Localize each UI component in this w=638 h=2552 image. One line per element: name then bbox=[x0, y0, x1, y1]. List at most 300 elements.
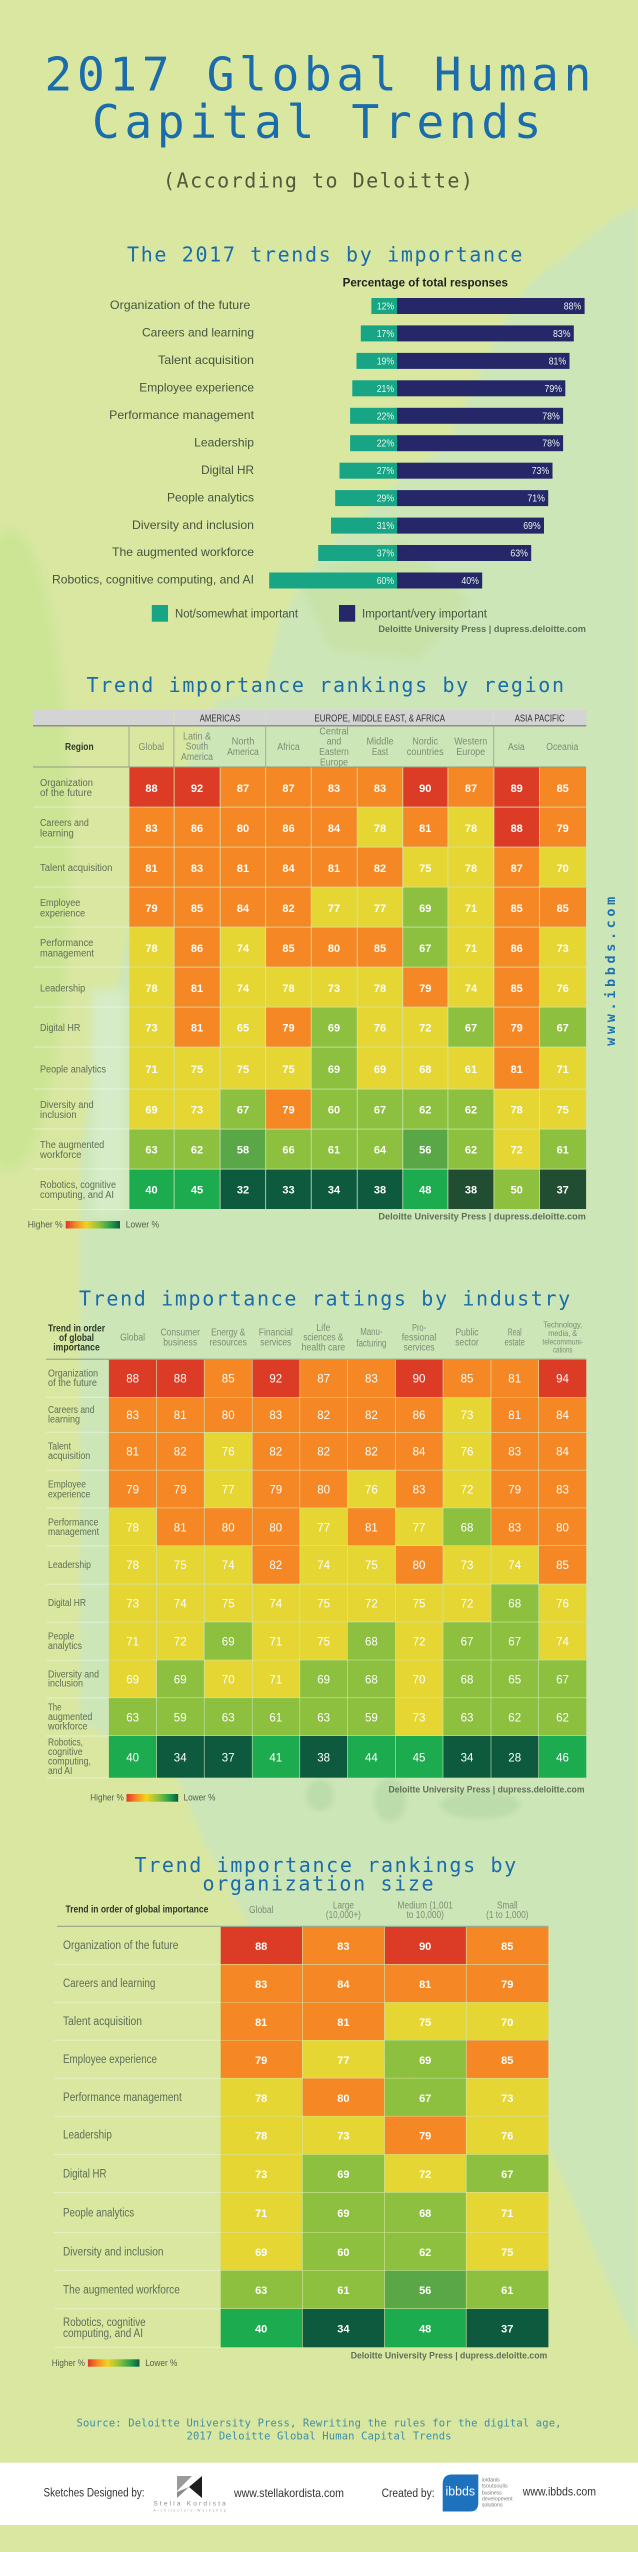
column headers: industry: facturing bbox=[356, 1338, 386, 1349]
bar row: Robotics, cognitive computing, and AI: Robotics, cognitive computing, and AI bbox=[52, 573, 254, 587]
heat row: Digital HR: 76 bbox=[556, 1598, 569, 1610]
heat row: Leadership: 81 bbox=[191, 983, 203, 995]
heat row: Talent acquisition: 81 bbox=[126, 1447, 139, 1459]
heat row: Careers and learning bbox=[109, 1398, 586, 1432]
bar row: Digital HR bbox=[201, 463, 552, 479]
heat row: People analytics: 69 bbox=[374, 1064, 386, 1076]
heat row: Performance management: 81 bbox=[365, 1522, 378, 1534]
panel: trends by importance bbox=[52, 242, 586, 635]
heat row: Diversity and inclusion: 75 bbox=[501, 2247, 513, 2259]
heat row: Performance management: 80 bbox=[337, 2093, 350, 2105]
heat row: Careers and learning: 81 bbox=[419, 1979, 431, 1991]
column headers: organization size: (1 to 1,000) bbox=[486, 1910, 528, 1921]
source note: Source: Deloitte University Press, Rewriting the rules for the digital age, bbox=[76, 2418, 562, 2430]
heat row: Organization of the future: 85 bbox=[461, 1374, 473, 1386]
heat row: The augmented workforce: 66 bbox=[282, 1144, 295, 1156]
column headers: America bbox=[181, 752, 213, 763]
footer band bbox=[0, 2463, 638, 2525]
column headers: industry: sector bbox=[455, 1337, 479, 1348]
heat row: The augmented workforce bbox=[129, 1130, 586, 1169]
column headers: industry: media, & bbox=[548, 1328, 577, 1338]
heat row: Talent acquisition: 82 bbox=[365, 1447, 378, 1459]
heat row: People analytics: 67 bbox=[508, 1636, 521, 1648]
heat row: Robotics, cognitive computing, and AI: 33 bbox=[282, 1184, 295, 1196]
heat row: Digital HR: 72 bbox=[461, 1598, 473, 1610]
heat row: Talent acquisition: 87 bbox=[511, 863, 523, 875]
heat row: People analytics: 71 bbox=[255, 2208, 267, 2220]
bar row: Diversity and inclusion bbox=[132, 518, 544, 534]
heat row: People analytics: 75 bbox=[191, 1064, 203, 1076]
heat row: Performance management: 68 bbox=[461, 1522, 473, 1534]
heat row: People analytics: 61 bbox=[465, 1064, 477, 1076]
heat row: Diversity and inclusion: 67 bbox=[556, 1674, 569, 1686]
heat row: Careers and learning: 82 bbox=[365, 1410, 378, 1422]
heat row: The augmented workforce: 63 bbox=[461, 1712, 473, 1724]
row labels: region table: Careers and bbox=[40, 818, 89, 829]
heat row: Leadership: 85 bbox=[556, 1560, 569, 1572]
heat row: The augmented workforce: 56 bbox=[419, 2285, 431, 2297]
column headers: Asia bbox=[508, 742, 525, 753]
heat row: Talent acquisition bbox=[109, 1433, 586, 1470]
heading: ratings by industry: Trend importance ratings by industry bbox=[79, 1286, 572, 1310]
heat row: Diversity and inclusion: 62 bbox=[419, 2247, 431, 2259]
column headers: Central bbox=[319, 726, 349, 737]
legend: industry heat scale bbox=[90, 1793, 216, 1804]
heat row: Leadership: 73 bbox=[337, 2130, 350, 2142]
column headers: industry: Consumer bbox=[160, 1328, 201, 1339]
heat row: Leadership: 74 bbox=[222, 1560, 235, 1572]
heat row: Careers and learning: 86 bbox=[191, 823, 203, 835]
heat row: Talent acquisition: 82 bbox=[317, 1447, 330, 1459]
row labels: organization size table: The augmented workforce bbox=[63, 2284, 180, 2296]
row labels: industry table: experience bbox=[48, 1489, 91, 1500]
heat row: Robotics, cognitive computing, and AI: 48 bbox=[419, 1184, 431, 1196]
column headers: countries bbox=[407, 747, 444, 758]
heat row: Leadership: 74 bbox=[508, 1560, 522, 1572]
heat row: Diversity and inclusion bbox=[221, 2232, 548, 2270]
heat row: Robotics, cognitive computing, and AI: 37 bbox=[501, 2324, 513, 2336]
heat row: Digital HR bbox=[109, 1584, 586, 1622]
icon: ibbds logo: solutions bbox=[482, 2503, 503, 2509]
column headers: industry: sciences & bbox=[303, 1333, 344, 1344]
heat row: Digital HR bbox=[129, 1008, 586, 1047]
bar row: Employee experience: 21% bbox=[377, 384, 394, 395]
heat row: Diversity and inclusion: 70 bbox=[413, 1674, 425, 1686]
title: 2017 Global Human bbox=[44, 48, 596, 102]
heat row: Diversity and inclusion: 67 bbox=[237, 1104, 249, 1116]
row labels: region table bbox=[33, 778, 129, 1210]
row labels: organization size table: Talent acquisition bbox=[63, 2016, 142, 2028]
legend: region heat scale bbox=[28, 1220, 160, 1231]
row labels: region table: learning bbox=[40, 828, 74, 839]
heading: trends by importance: The 2017 trends by importance bbox=[127, 242, 524, 266]
heat row: Diversity and inclusion: 69 bbox=[145, 1104, 158, 1116]
column headers: organization size: to 10,000) bbox=[406, 1910, 444, 1921]
heat row: Performance management: 80 bbox=[328, 943, 340, 955]
heat row: Careers and learning: 86 bbox=[282, 823, 295, 835]
heat row: Organization of the future: 85 bbox=[501, 1941, 513, 1953]
heat row: Talent acquisition bbox=[129, 848, 586, 887]
row labels: region table: Organization bbox=[40, 778, 93, 789]
column headers: industry: of global bbox=[59, 1333, 94, 1344]
chart subtitle: Percentage of total responses bbox=[343, 278, 508, 290]
heat row: Leadership: 75 bbox=[174, 1560, 187, 1572]
heat row: People analytics bbox=[109, 1622, 586, 1660]
column headers: Africa bbox=[277, 742, 300, 753]
row labels: industry table: People bbox=[48, 1631, 75, 1642]
heat row: Talent acquisition: 78 bbox=[465, 863, 477, 875]
heat row: Organization of the future bbox=[129, 768, 586, 807]
bar row: Robotics, cognitive computing, and AI: 40% bbox=[461, 576, 479, 587]
heat row: Careers and learning: 83 bbox=[255, 1979, 267, 1991]
heat row: People analytics: 81 bbox=[511, 1064, 523, 1076]
heat row: Performance management: 85 bbox=[282, 943, 295, 955]
bar row: The augmented workforce: 37% bbox=[377, 548, 394, 560]
heat row: Organization of the future: 88 bbox=[145, 783, 158, 795]
heat row: Employee experience: 79 bbox=[255, 2055, 267, 2067]
region band header bbox=[33, 710, 586, 726]
row labels: industry table: acquisition bbox=[48, 1451, 90, 1462]
heat row: Leadership: 74 bbox=[317, 1560, 331, 1572]
heat row: Performance management: 80 bbox=[222, 1522, 235, 1534]
heat row: Diversity and inclusion: 60 bbox=[337, 2247, 350, 2259]
heat row: Leadership: 73 bbox=[461, 1560, 473, 1572]
heat row: The augmented workforce: 63 bbox=[145, 1144, 158, 1156]
row labels: industry table: management bbox=[48, 1527, 99, 1538]
heat row: Talent acquisition: 75 bbox=[419, 863, 431, 875]
column headers: industry: Technology, bbox=[543, 1320, 582, 1330]
column headers: industry: services bbox=[260, 1337, 291, 1348]
bar row: Careers and learning bbox=[142, 325, 574, 341]
heat row: Talent acquisition: 81 bbox=[328, 863, 340, 875]
heat row: Digital HR: 72 bbox=[419, 1023, 431, 1035]
heat row: Employee experience: 72 bbox=[461, 1484, 473, 1496]
bar row: People analytics: 29% bbox=[377, 494, 394, 505]
heat row: People analytics: 68 bbox=[365, 1636, 378, 1648]
row labels: organization size table: Digital HR bbox=[63, 2168, 106, 2180]
row labels: organization size table: Employee experience bbox=[63, 2054, 157, 2066]
row labels: industry table: Performance bbox=[48, 1517, 99, 1528]
heat row: Leadership: 73 bbox=[328, 983, 340, 995]
heatmap: organization size bbox=[221, 1927, 548, 2347]
bar row: Performance management: Performance management bbox=[109, 408, 255, 422]
heat row: Employee experience: 69 bbox=[419, 2055, 431, 2067]
row labels: industry table: and AI bbox=[48, 1766, 72, 1777]
heat row: Careers and learning: 79 bbox=[501, 1979, 513, 1991]
bar row: Robotics, cognitive computing, and AI bbox=[52, 572, 482, 588]
heat row: Diversity and inclusion: 69 bbox=[255, 2247, 267, 2259]
column headers: industry: resources bbox=[210, 1337, 247, 1348]
row labels: industry table: Employee bbox=[48, 1480, 86, 1491]
heat row: Leadership: 74 bbox=[237, 983, 250, 995]
source credit: Deloitte University Press | dupress.deloitte.com bbox=[378, 1211, 586, 1222]
heat row: Diversity and inclusion: 69 bbox=[126, 1674, 139, 1686]
bar row: Digital HR: Digital HR bbox=[201, 463, 254, 477]
row labels: organization size table: Careers and learning bbox=[63, 1978, 155, 1990]
heat row: Careers and learning: 83 bbox=[126, 1410, 139, 1422]
column headers: Global bbox=[138, 742, 164, 753]
heat row: Digital HR: 72 bbox=[419, 2169, 431, 2181]
source credit: Deloitte University Press | dupress.deloitte.com bbox=[378, 624, 586, 635]
icon: ibbds logo: iordanis bbox=[482, 2478, 500, 2484]
heat row: Leadership: 78 bbox=[145, 983, 158, 995]
row labels: industry table: of the future bbox=[48, 1378, 97, 1389]
heat row: Diversity and inclusion: 68 bbox=[365, 1674, 378, 1686]
column headers: industry: Real bbox=[508, 1328, 522, 1339]
heat row: Talent acquisition: 76 bbox=[222, 1447, 235, 1459]
bar row: Talent acquisition bbox=[158, 353, 570, 369]
heat row: People analytics: 72 bbox=[174, 1636, 187, 1648]
panel: ratings by industry bbox=[46, 1286, 586, 1804]
bar row: Robotics, cognitive computing, and AI: 60% bbox=[377, 576, 394, 587]
heat row: Employee experience: 79 bbox=[126, 1484, 139, 1496]
heat row: Careers and learning: 80 bbox=[237, 823, 249, 835]
row labels: industry table: Talent bbox=[48, 1441, 71, 1452]
heat row: Careers and learning bbox=[221, 1965, 548, 2002]
row labels: organization size table: Diversity and inclusion bbox=[63, 2246, 164, 2258]
heat row: Leadership: 78 bbox=[255, 2130, 267, 2142]
heat row: Employee experience: 79 bbox=[508, 1484, 521, 1496]
heat row: The augmented workforce: 61 bbox=[328, 1144, 340, 1156]
heat row: Performance management bbox=[129, 928, 586, 967]
heat row: Performance management: 73 bbox=[557, 943, 569, 955]
column headers: industry: fessional bbox=[402, 1333, 436, 1344]
heat row: The augmented workforce bbox=[109, 1698, 586, 1736]
heat row: Robotics, cognitive computing, and AI: 37 bbox=[557, 1184, 569, 1196]
heat row: Diversity and inclusion: 62 bbox=[465, 1104, 477, 1116]
credit: sketches designer: Sketches Designed by: bbox=[44, 2488, 144, 2500]
heat row: Performance management: 86 bbox=[191, 943, 203, 955]
heat row: Digital HR: 73 bbox=[145, 1023, 158, 1035]
heat row: Performance management: 80 bbox=[269, 1522, 282, 1534]
heat row: The augmented workforce: 59 bbox=[174, 1712, 187, 1724]
heat row: People analytics: 71 bbox=[145, 1064, 158, 1076]
heat row: Digital HR: 74 bbox=[269, 1598, 283, 1610]
website: ibbds: www.ibbds.com bbox=[522, 2484, 596, 2498]
heat row: Employee experience: 79 bbox=[269, 1484, 282, 1496]
row labels: region table: Leadership bbox=[40, 983, 86, 994]
bar row: Careers and learning: Careers and learning bbox=[142, 326, 254, 340]
legend: importance: Not/somewhat important bbox=[175, 608, 299, 620]
heat row: Talent acquisition: 84 bbox=[413, 1447, 426, 1459]
row labels: region table: computing, and AI bbox=[40, 1190, 114, 1201]
row labels: industry table: learning bbox=[48, 1415, 80, 1426]
heat row: People analytics bbox=[221, 2193, 548, 2232]
row labels: region table: The augmented bbox=[40, 1140, 104, 1151]
column headers: industry: estate bbox=[505, 1337, 525, 1348]
heat row: The augmented workforce: 61 bbox=[501, 2285, 513, 2297]
heat row: The augmented workforce: 73 bbox=[413, 1712, 425, 1724]
heat row: Organization of the future: 83 bbox=[328, 783, 340, 795]
row labels: organization size table bbox=[54, 1940, 220, 2347]
column headers: industry: Global bbox=[120, 1333, 145, 1344]
heat row: The augmented workforce bbox=[221, 2271, 548, 2308]
heat row: Diversity and inclusion: 62 bbox=[419, 1104, 431, 1116]
bar row: Organization of the future: Organization of the future bbox=[110, 298, 251, 312]
heat row: Performance management: 83 bbox=[508, 1522, 521, 1534]
heat row: People analytics: 69 bbox=[222, 1636, 235, 1648]
heat row: Employee experience bbox=[109, 1470, 586, 1508]
heat row: The augmented workforce: 61 bbox=[269, 1712, 282, 1724]
heat row: Robotics, cognitive computing, and AI: 37 bbox=[222, 1752, 235, 1764]
icon: Stella Kordista logo bbox=[153, 2476, 226, 2512]
heat row: Digital HR: 67 bbox=[557, 1023, 569, 1035]
subtitle: (According to Deloitte) bbox=[163, 168, 474, 192]
row labels: region table: Talent acquisition bbox=[40, 863, 112, 874]
heat row: Leadership: 78 bbox=[126, 1560, 139, 1572]
source note: 2017 Deloitte Global Human Capital Trends bbox=[186, 2430, 452, 2442]
row labels: region table: Digital HR bbox=[40, 1023, 80, 1034]
heat row: Performance management: 78 bbox=[126, 1522, 139, 1534]
row labels: region table: workforce bbox=[39, 1150, 82, 1161]
heat row: Diversity and inclusion: 70 bbox=[222, 1674, 235, 1686]
heat row: Employee experience bbox=[129, 888, 586, 927]
row labels: industry table: computing, bbox=[48, 1757, 91, 1768]
heat row: The augmented workforce: 64 bbox=[374, 1144, 387, 1156]
heat row: The augmented workforce: 72 bbox=[511, 1144, 523, 1156]
heat row: Robotics, cognitive computing, and AI bbox=[109, 1736, 586, 1778]
heat row: Digital HR: 75 bbox=[317, 1598, 330, 1610]
heat row: Performance management: 80 bbox=[556, 1522, 569, 1534]
heat row: Talent acquisition: 70 bbox=[501, 2017, 513, 2029]
heat row: People analytics: 71 bbox=[269, 1636, 282, 1648]
heat row: Robotics, cognitive computing, and AI: 38 bbox=[465, 1184, 477, 1196]
heat row: Performance management: 67 bbox=[419, 2093, 431, 2105]
heat row: Organization of the future: 83 bbox=[337, 1941, 350, 1953]
icon: ibbds logo: development bbox=[482, 2497, 513, 2503]
heat row: Leadership: 78 bbox=[374, 983, 386, 995]
legend: organization size heat scale: Lower % bbox=[145, 2358, 178, 2369]
heat row: Digital HR: 73 bbox=[126, 1598, 139, 1610]
column headers: Middle bbox=[366, 737, 394, 748]
heat row: Careers and learning: 86 bbox=[413, 1410, 425, 1422]
heat row: Careers and learning bbox=[129, 808, 586, 847]
bar row: Organization of the future bbox=[110, 298, 585, 314]
heat row: Diversity and inclusion: 69 bbox=[174, 1674, 187, 1686]
heat row: Leadership: 74 bbox=[465, 983, 478, 995]
heat row: Digital HR: 79 bbox=[511, 1023, 523, 1035]
heat row: The augmented workforce: 62 bbox=[191, 1144, 203, 1156]
source credit: Deloitte University Press | dupress.deloitte.com bbox=[351, 2350, 547, 2361]
column headers: industry: Public bbox=[456, 1328, 478, 1339]
heat row: Organization of the future: 92 bbox=[269, 1374, 282, 1386]
column headers: industry: health care bbox=[302, 1342, 346, 1353]
heat row: Talent acquisition: 70 bbox=[557, 863, 569, 875]
heat row: Leadership: 82 bbox=[269, 1560, 282, 1572]
heat row: Performance management bbox=[109, 1508, 586, 1545]
heat row: Organization of the future: 87 bbox=[282, 783, 295, 795]
bar row: Leadership: Leadership bbox=[194, 435, 254, 449]
heat row: Careers and learning: 73 bbox=[461, 1410, 473, 1422]
heat row: Talent acquisition: 83 bbox=[191, 863, 203, 875]
heat row: The augmented workforce: 63 bbox=[255, 2285, 267, 2297]
heat row: Diversity and inclusion bbox=[109, 1660, 586, 1698]
row labels: organization size table: computing, and AI bbox=[63, 2328, 143, 2340]
icon: ibbds logo: ibbds bbox=[446, 2484, 475, 2499]
region band header: ASIA PACIFIC bbox=[515, 713, 565, 724]
heat row: Performance management: 77 bbox=[413, 1522, 425, 1534]
icon: Stella Kordista logo: Architecture Workshop bbox=[153, 2508, 226, 2512]
heat row: Talent acquisition: 76 bbox=[461, 1447, 473, 1459]
heat row: Diversity and inclusion: 75 bbox=[557, 1104, 569, 1116]
source note bbox=[76, 2418, 562, 2442]
heat row: Digital HR: 65 bbox=[237, 1023, 249, 1035]
heat row: People analytics: 72 bbox=[413, 1636, 425, 1648]
heat row: Organization of the future: 90 bbox=[419, 783, 431, 795]
legend: industry heat scale: Lower % bbox=[184, 1793, 216, 1804]
heat row: Organization of the future: 90 bbox=[419, 1941, 431, 1953]
heat row: Employee experience: 83 bbox=[413, 1484, 425, 1496]
column headers: organization size: Global bbox=[249, 1905, 273, 1916]
column headers: Oceania bbox=[546, 742, 579, 753]
heat row: The augmented workforce: 61 bbox=[337, 2285, 350, 2297]
heat row: Talent acquisition: 75 bbox=[419, 2017, 431, 2029]
heat row: Talent acquisition: 81 bbox=[145, 863, 158, 875]
row labels: industry table: workforce bbox=[47, 1722, 88, 1733]
heat row: Organization of the future: 92 bbox=[191, 783, 203, 795]
heat row: Leadership bbox=[109, 1546, 586, 1584]
heat row: Employee experience: 84 bbox=[237, 903, 250, 915]
heat row: Employee experience: 82 bbox=[282, 903, 295, 915]
heat row: Performance management: 81 bbox=[174, 1522, 187, 1534]
heat row: Digital HR: 68 bbox=[508, 1598, 521, 1610]
bar row: People analytics: People analytics bbox=[167, 490, 254, 504]
row labels: organization size table: Leadership bbox=[63, 2130, 112, 2142]
heat row: Diversity and inclusion: 68 bbox=[461, 1674, 473, 1686]
column headers: organization size: Small bbox=[497, 1900, 518, 1911]
heat row: Robotics, cognitive computing, and AI: 45 bbox=[191, 1184, 203, 1196]
legend: importance bbox=[152, 605, 488, 622]
heat row: Robotics, cognitive computing, and AI: 34 bbox=[174, 1752, 187, 1764]
bar row: Careers and learning: 83% bbox=[553, 329, 571, 340]
heat row: Organization of the future: 83 bbox=[365, 1374, 378, 1386]
column headers: organization size bbox=[57, 1900, 548, 1927]
heat row: Robotics, cognitive computing, and AI: 34 bbox=[328, 1184, 341, 1196]
heat row: Robotics, cognitive computing, and AI: 38 bbox=[317, 1752, 330, 1764]
heat row: Leadership: 79 bbox=[419, 2130, 431, 2142]
heat row: Performance management: 78 bbox=[255, 2093, 267, 2105]
heat row: Employee experience: 69 bbox=[419, 903, 431, 915]
column headers: industry bbox=[46, 1320, 586, 1360]
column headers bbox=[33, 726, 586, 768]
column headers: Europe bbox=[456, 747, 486, 758]
heat row: Robotics, cognitive computing, and AI bbox=[129, 1170, 586, 1209]
heat row: Employee experience: 80 bbox=[317, 1484, 330, 1496]
heat row: People analytics: 68 bbox=[419, 2208, 431, 2220]
heat row: The augmented workforce: 56 bbox=[419, 1144, 431, 1156]
heat row: The augmented workforce: 62 bbox=[465, 1144, 477, 1156]
heat row: The augmented workforce: 63 bbox=[222, 1712, 235, 1724]
heat row: Leadership: 76 bbox=[557, 983, 569, 995]
row labels: industry table: cognitive bbox=[48, 1747, 83, 1758]
heat row: Employee experience: 85 bbox=[191, 903, 203, 915]
heat row: Organization of the future: 90 bbox=[413, 1374, 425, 1386]
heat row: Performance management: 67 bbox=[419, 943, 431, 955]
row labels: region table: Diversity and bbox=[40, 1100, 94, 1111]
heat row: Careers and learning: 88 bbox=[511, 823, 523, 835]
heat row: Digital HR: 72 bbox=[365, 1598, 378, 1610]
bar row: Talent acquisition: Talent acquisition bbox=[158, 353, 254, 367]
bar row: Performance management: 78% bbox=[542, 411, 560, 422]
heat row: Robotics, cognitive computing, and AI bbox=[221, 2309, 548, 2347]
bar row: Careers and learning: 17% bbox=[377, 329, 394, 340]
heat row: Careers and learning: 81 bbox=[174, 1410, 187, 1422]
column headers: organization size: (10,000+) bbox=[326, 1910, 361, 1921]
column headers: Europe bbox=[320, 757, 348, 768]
heat row: Talent acquisition: 81 bbox=[237, 863, 249, 875]
column headers: industry: Energy & bbox=[211, 1328, 246, 1339]
legend: organization size heat scale bbox=[52, 2358, 178, 2369]
